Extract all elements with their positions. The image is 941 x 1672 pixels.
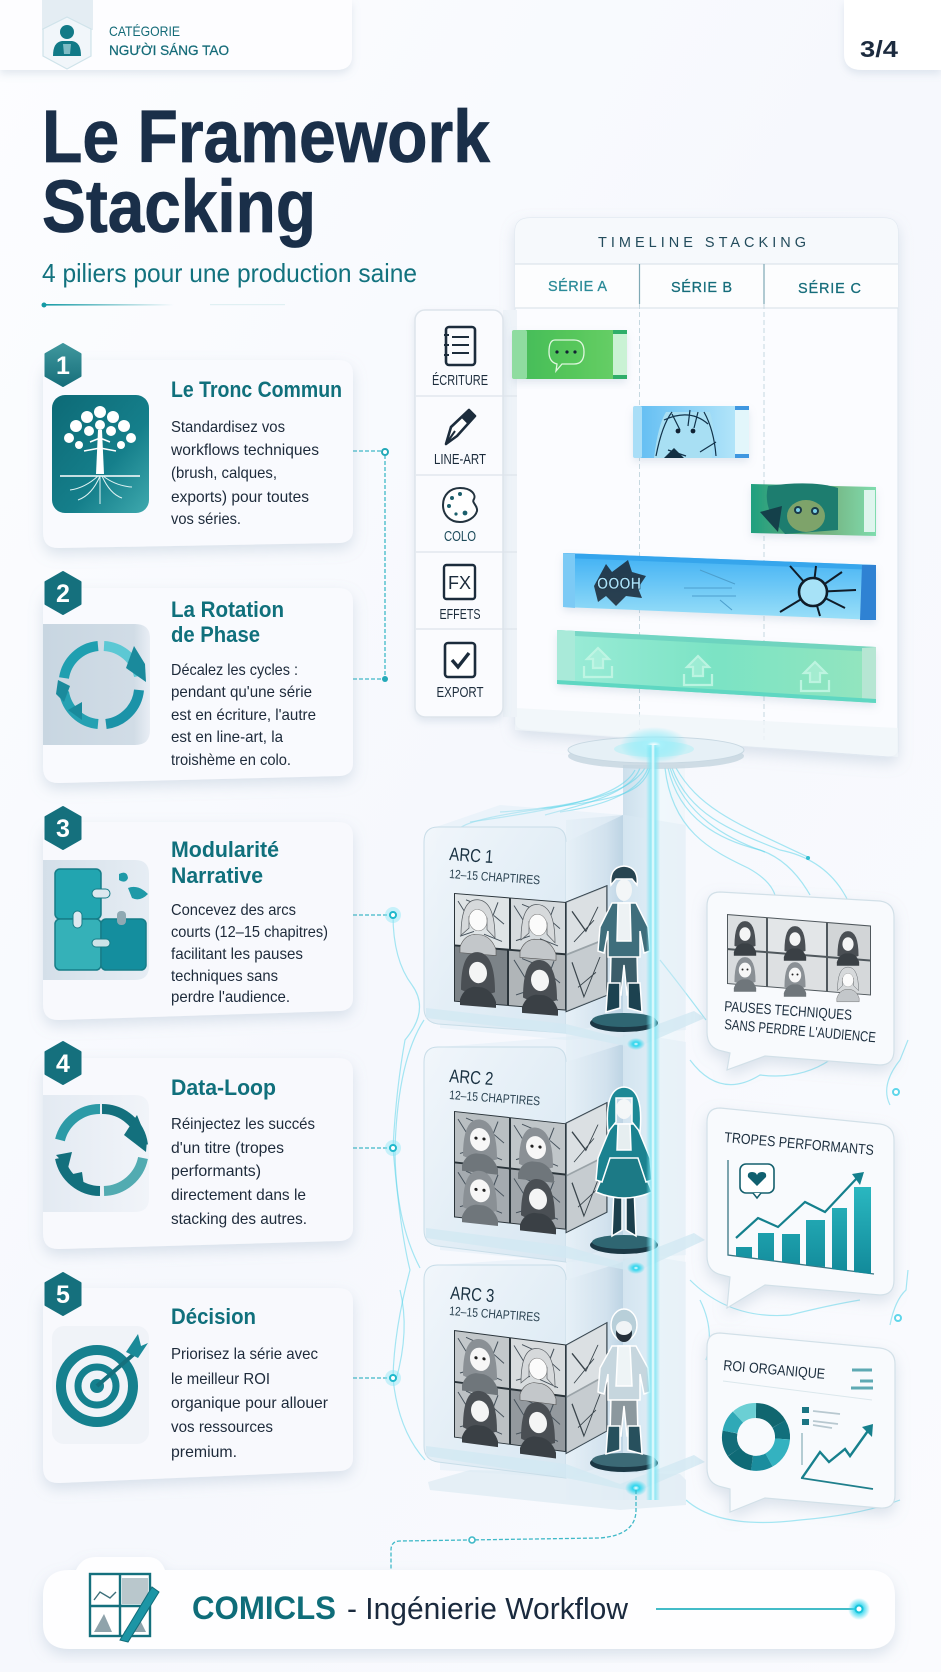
pillar 1 text: (brush, calques,: [171, 465, 277, 482]
pillar connection nodes: [385, 907, 401, 1386]
callout text: [724, 999, 877, 1046]
icon: heart bubble: [740, 1164, 774, 1198]
pillar 5 text: Priorisez la série avec: [171, 1346, 318, 1363]
stage: effets: EFFETS: [440, 606, 480, 623]
series labels: SÉRIE C: [798, 280, 861, 297]
icon: target: [52, 1326, 149, 1444]
pillar 3 text: [171, 902, 328, 1006]
stage: line-art: [434, 410, 486, 468]
stage: export: EXPORT: [436, 684, 484, 701]
pillar 4 text: Réinjectez les succés: [171, 1116, 315, 1133]
pillar 4 text: directement dans le: [171, 1187, 306, 1204]
arc 2 label: ARC 2: [449, 1065, 494, 1089]
mini legend: [851, 1370, 873, 1388]
manga strip: [727, 914, 871, 1002]
pillar 2 heading: La Rotation: [171, 597, 284, 622]
pillar 2 heading: [171, 597, 284, 647]
pillar 3 heading: Narrative: [171, 863, 263, 888]
callout text: PAUSES TECHNIQUES: [724, 999, 853, 1024]
pillar 2 heading: de Phase: [171, 622, 260, 647]
title: [42, 95, 491, 248]
arc 1 label: 12–15 CHAPTIRES: [449, 867, 541, 887]
series labels: SÉRIE A: [548, 278, 607, 295]
badge 3: 3: [56, 815, 70, 843]
badge 5: [46, 1273, 80, 1315]
pillar 3 text: courts (12–15 chapitres): [171, 924, 328, 941]
arc 2 label: 12–15 CHAPTIRES: [449, 1088, 541, 1108]
arc 1 manga pages: [454, 886, 607, 1016]
sfx burst: OOOH: [597, 574, 641, 593]
gantt bar: colo, série C: [751, 483, 876, 536]
pillar 3 heading: [171, 837, 279, 888]
series labels: SÉRIE B: [671, 279, 732, 296]
arc 3 label: ARC 3: [450, 1282, 495, 1306]
pillar 1 text: exports) pour toutes: [171, 489, 309, 506]
card 2: La Rotation de Phase: [43, 572, 353, 783]
icon: rotation cycle: [43, 624, 150, 745]
arc 3 label: 12–15 CHAPTIRES: [449, 1304, 541, 1324]
icon: creator badge: [43, 17, 91, 69]
pillar 4 heading: Data-Loop: [171, 1075, 276, 1100]
icon: puzzle: [43, 860, 149, 980]
pillar 3 text: perdre l'audience.: [171, 989, 290, 1006]
card 4: Data-Loop: [43, 1042, 353, 1249]
badge 2: 2: [56, 580, 70, 608]
icon: data loop: [43, 1095, 149, 1212]
bottom plinth: [428, 1470, 686, 1510]
pillar 5 text: [171, 1346, 329, 1461]
stage: colo: [443, 488, 477, 545]
callout heading: ROI ORGANIQUE: [723, 1358, 826, 1383]
category text: [109, 23, 229, 58]
callout text: SANS PERDRE L'AUDIENCE: [724, 1017, 877, 1046]
gantt bar: line-art, série B: [633, 406, 749, 458]
stage: écriture: ÉCRITURE: [432, 372, 488, 389]
timeline heading: TIMELINE STACKING: [598, 235, 806, 251]
pillar 3 heading: Modularité: [171, 837, 279, 862]
callout: roi organique: [707, 1333, 895, 1512]
badge 2: [46, 572, 80, 614]
footer brand: [192, 1590, 629, 1626]
footer brand: COMICLS: [192, 1590, 336, 1626]
card 3: Modularité Narrative: [43, 807, 353, 1020]
figure: arc 1 character: [590, 866, 658, 1032]
subtitle: 4 piliers pour une production saine: [42, 258, 417, 288]
pillar 4 text: [171, 1116, 315, 1228]
central light beam: [625, 745, 660, 1500]
dotted bottom connector: [391, 1490, 636, 1570]
callout heading: TROPES PERFORMANTS: [724, 1130, 874, 1159]
badge 4: [46, 1042, 80, 1084]
gantt bar: effets, all series: [563, 553, 876, 620]
card 5: Décision: [43, 1273, 353, 1483]
gantt bar: export, all series: [557, 630, 876, 703]
title: Stacking: [42, 165, 316, 248]
stage: écriture: [432, 327, 488, 389]
pillar 1 heading: Le Tronc Commun: [171, 377, 342, 402]
pillar 3 text: facilitant les pauses: [171, 946, 303, 963]
pillar 5 text: le meilleur ROI: [171, 1371, 270, 1388]
glowing hub disc: [568, 727, 744, 769]
arc 3 label: [449, 1282, 541, 1324]
arc 1 label: ARC 1: [449, 843, 494, 867]
stages sidebar: [415, 310, 517, 717]
arc 3 glass block: [424, 1252, 705, 1492]
arc 1 label: [449, 843, 541, 887]
pillar 1 text: Standardisez vos: [171, 419, 285, 436]
donut chart: [729, 1410, 783, 1463]
pillar 4 text: d'un titre (tropes: [171, 1140, 284, 1157]
subtitle underline: [42, 302, 285, 308]
arc 2 manga pages: [454, 1102, 607, 1235]
callout: pauses techniques: [707, 892, 894, 1070]
timeline panel: [515, 218, 898, 757]
bar and line chart: [728, 1160, 874, 1274]
pillar 1 text: workflows techniques: [170, 442, 319, 459]
pillar 2 text: troishème en colo.: [171, 752, 291, 769]
page counter tab: 3/4: [860, 36, 898, 62]
pillar 2 text: pendant qu'une série: [171, 684, 312, 701]
callout: tropes performants: [707, 1108, 894, 1308]
pillar 2 text: [171, 662, 316, 769]
footer line and node: [656, 1598, 870, 1620]
stage: effets: [440, 565, 480, 623]
pillar 3 text: Concevez des arcs: [171, 902, 296, 919]
pillar 1 text: [170, 419, 319, 528]
footer bar: [43, 1557, 895, 1649]
figure: arc 2 character: [590, 1087, 658, 1254]
category text: NGƯỜI SÁNG TAO: [109, 42, 229, 58]
stage: export: [436, 643, 484, 701]
pillar 4 text: performants): [171, 1163, 261, 1180]
pillar 1 text: vos séries.: [171, 511, 241, 528]
arc 1 glass block: [424, 805, 705, 1048]
icon: comic panels and pen: [90, 1574, 159, 1642]
card 1: Le Tronc Commun: [43, 344, 353, 548]
pillar 5 heading: Décision: [171, 1304, 256, 1329]
badge 4: 4: [56, 1050, 70, 1078]
pillar 5 text: premium.: [171, 1444, 237, 1461]
badge 1: [46, 344, 80, 386]
tower column: [566, 765, 685, 1500]
footer brand: - Ingénierie Workflow: [347, 1591, 629, 1626]
gantt bar: écriture, série A: [512, 330, 627, 379]
title: Le Framework: [42, 95, 491, 178]
sfx burst: [594, 560, 646, 606]
arc 2 glass block: [424, 1032, 705, 1272]
pillar 2 text: Décalez les cycles :: [171, 662, 298, 679]
series labels: [548, 278, 861, 297]
arc 2 label: [449, 1065, 541, 1108]
energy flow lines: [395, 768, 908, 1522]
icon: tree: [52, 395, 149, 513]
pillar 4 text: stacking des autres.: [171, 1211, 307, 1228]
connectors from pillars: [353, 449, 425, 1460]
badge 5: 5: [56, 1281, 70, 1309]
legend and trend chart: [801, 1407, 873, 1489]
stage: effets: FX: [448, 573, 471, 593]
stage: line-art: LINE-ART: [434, 451, 486, 468]
badge 1: 1: [56, 352, 70, 380]
figure: arc 3 character: [590, 1309, 658, 1472]
pillar 3 text: techniques sans: [171, 968, 278, 985]
category text: CATÉGORIE: [109, 23, 180, 39]
pillar 2 text: est en line-art, la: [171, 729, 283, 746]
badge 3: [46, 807, 80, 849]
pillar 2 text: est en écriture, l'autre: [171, 707, 316, 724]
stage: colo: COLO: [444, 528, 476, 545]
page counter tab: [844, 0, 941, 70]
arc 3 manga pages: [454, 1322, 607, 1460]
pillar 5 text: vos ressources: [171, 1419, 273, 1436]
header: category pill: [0, 0, 352, 70]
pillar 5 text: organique pour allouer: [171, 1395, 329, 1412]
